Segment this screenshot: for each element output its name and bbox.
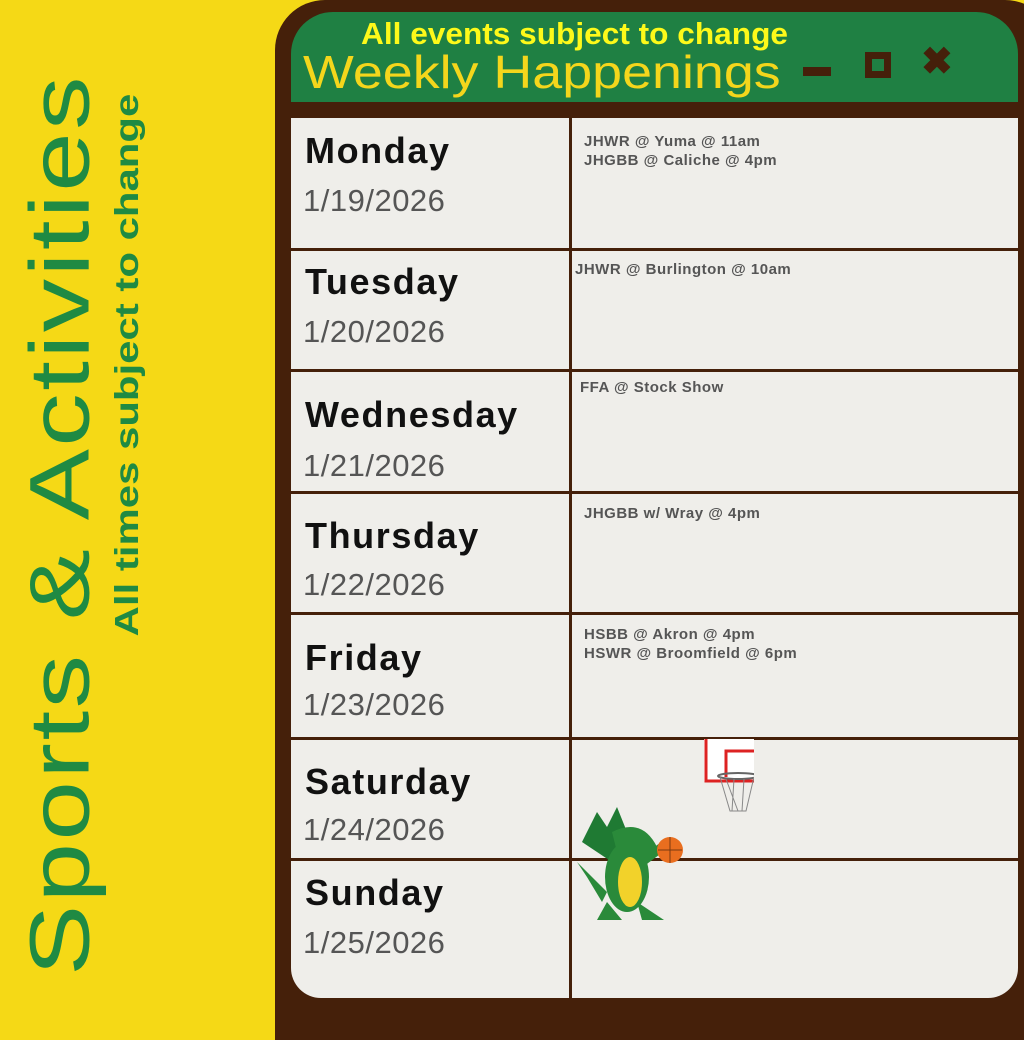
text: JHGBB w/ Wray @ 4pm	[584, 505, 760, 522]
text: JHWR @ Burlington @ 10am	[575, 261, 791, 278]
text: HSBB @ Akron @ 4pm	[584, 626, 755, 643]
text: 1/22/2026	[303, 567, 445, 602]
header title: Weekly Happenings	[303, 46, 781, 98]
side subtitle: All times subject to change	[108, 94, 145, 636]
Monday: Monday	[305, 130, 451, 171]
icon: dragon mascot with basketball	[577, 807, 683, 920]
window icons	[803, 41, 953, 83]
text: FFA @ Stock Show	[580, 379, 724, 396]
header bar	[291, 12, 1018, 102]
schedule grid	[291, 118, 1018, 998]
Saturday: Saturday	[305, 761, 472, 802]
text: HSWR @ Broomfield @ 6pm	[584, 645, 797, 662]
side title: Sports & Activities: Sports & Activities	[12, 74, 106, 976]
text: 1/19/2026	[303, 183, 445, 218]
Sunday: Sunday	[305, 872, 445, 913]
text: 1/20/2026	[303, 314, 445, 349]
text: 1/23/2026	[303, 687, 445, 722]
text: JHWR @ Yuma @ 11am	[584, 133, 760, 150]
Thursday: Thursday	[305, 515, 480, 556]
Friday: Friday	[305, 637, 423, 678]
text: 1/25/2026	[303, 925, 445, 960]
Tuesday: Tuesday	[305, 261, 460, 302]
text: JHGBB @ Caliche @ 4pm	[584, 152, 777, 169]
icon: basketball hoop	[704, 739, 754, 812]
window icons: ✖	[921, 41, 953, 83]
window frame	[275, 0, 1024, 1040]
text: 1/24/2026	[303, 812, 445, 847]
header subtitle: All events subject to change	[361, 16, 788, 51]
Wednesday: Wednesday	[305, 394, 519, 435]
text: 1/21/2026	[303, 448, 445, 483]
